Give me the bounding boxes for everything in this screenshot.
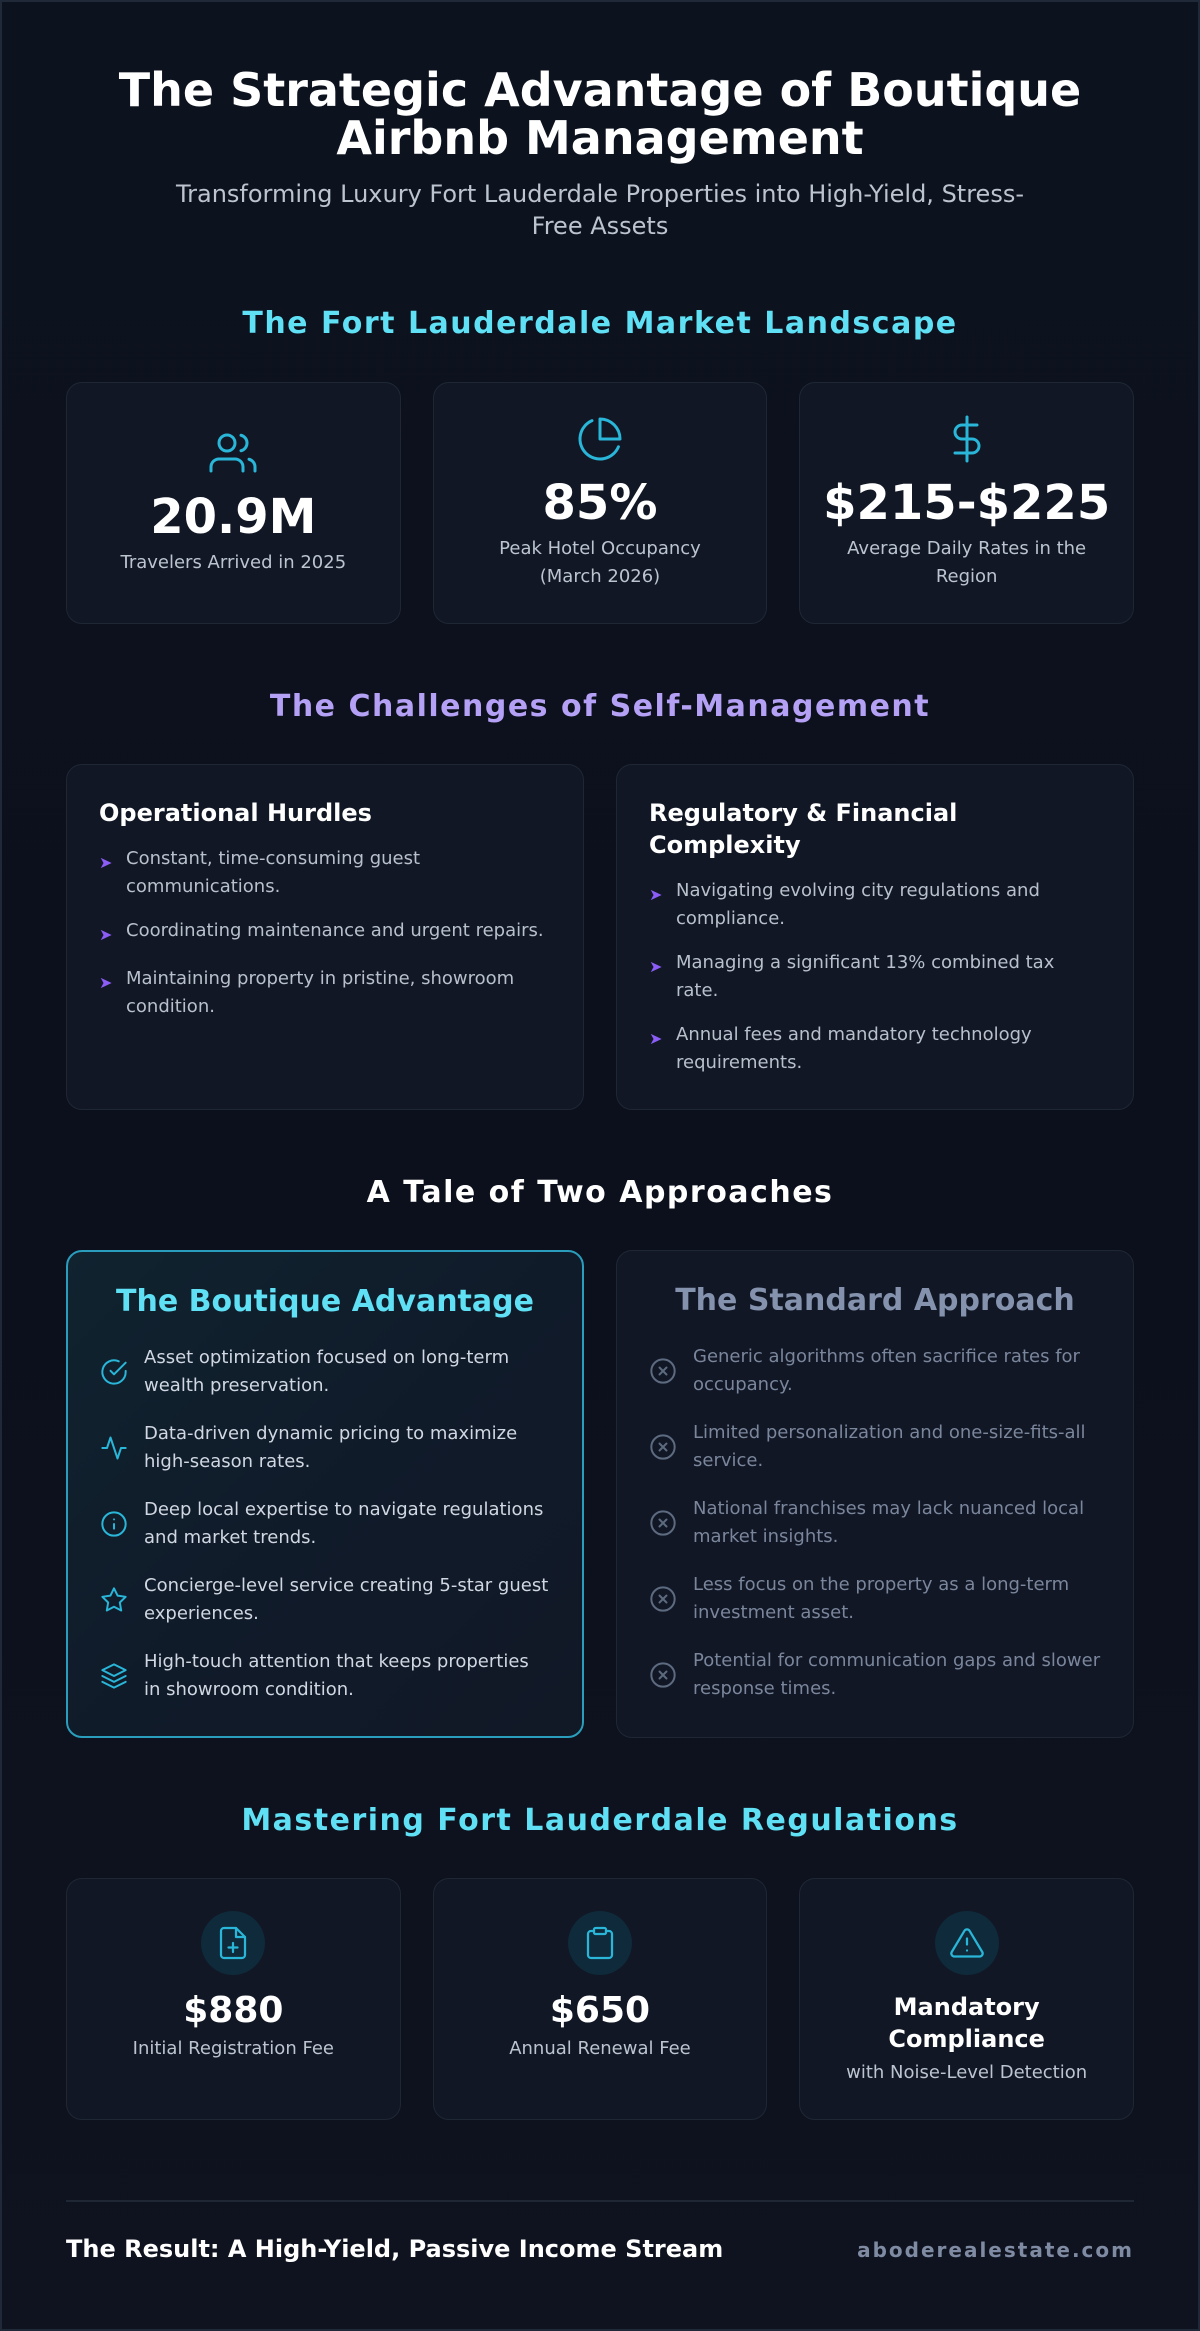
icon: activity: [101, 1436, 127, 1460]
drawback row: [650, 1422, 1086, 1471]
list item: Managing a significant 13% combined tax: [676, 952, 1054, 973]
row text: [144, 1423, 517, 1472]
panel: initial registration fee: [66, 1878, 401, 2120]
row text: Deep local expertise to navigate regulations: [144, 1499, 543, 1520]
row text: investment asset.: [693, 1602, 854, 1623]
footer divider: [66, 2200, 1134, 2202]
row text: experiences.: [144, 1603, 259, 1624]
panel: market stat travelers: [66, 382, 401, 624]
list item: condition.: [126, 996, 215, 1017]
row text: National franchises may lack nuanced local: [693, 1498, 1084, 1519]
row text: Generic algorithms often sacrifice rates for: [693, 1346, 1080, 1367]
compliance heading: [832, 1991, 1101, 2055]
row text: Potential for communication gaps and slower: [693, 1650, 1100, 1671]
feature row: [101, 1499, 543, 1548]
icon: warning triangle: [935, 1911, 999, 1975]
stat label: Travelers Arrived in 2025: [120, 552, 346, 573]
panel heading: Complexity: [649, 831, 801, 859]
heading: challenges: The Challenges of Self-Management: [270, 688, 930, 724]
icon: info: [101, 1511, 127, 1537]
row text: and market trends.: [144, 1527, 316, 1548]
icon: file plus: [201, 1911, 265, 1975]
list item: ➤: [99, 853, 112, 872]
list item: ➤: [649, 885, 662, 904]
list item: [99, 968, 514, 1017]
list item: Navigating evolving city regulations and: [676, 880, 1040, 901]
panel: annual renewal fee: [433, 1878, 767, 2120]
list item: [649, 1024, 1032, 1073]
panel: market stat occupancy: [433, 382, 767, 624]
footer: result statement: The Result: A High-Yield, Passive Income Stream: [66, 2235, 723, 2263]
list item: Maintaining property in pristine, showroom: [126, 968, 514, 989]
row text: Asset optimization focused on long-term: [144, 1347, 509, 1368]
icon: x circle: [649, 1661, 677, 1689]
icon: users: [210, 434, 256, 472]
row text: [144, 1575, 548, 1624]
stat label: Average Daily Rates in the: [847, 538, 1086, 559]
panel: market stat daily rates: [799, 382, 1134, 624]
stat value: $215-$225: [823, 475, 1110, 531]
header: title and subtitle: [118, 62, 1081, 240]
list item: Coordinating maintenance and urgent repairs.: [126, 920, 544, 941]
panel: boutique advantage: [66, 1250, 584, 1738]
title: Airbnb Management: [336, 110, 864, 164]
row text: Less focus on the property as a long-term: [693, 1574, 1069, 1595]
row text: Data-driven dynamic pricing to maximize: [144, 1423, 517, 1444]
icon: x circle: [650, 1434, 676, 1460]
list item: requirements.: [676, 1052, 802, 1073]
row text: market insights.: [693, 1526, 838, 1547]
drawback row: [650, 1346, 1080, 1395]
row text: wealth preservation.: [144, 1375, 329, 1396]
row text: [693, 1422, 1086, 1471]
row text: occupancy.: [693, 1374, 793, 1395]
icon: dollar sign: [954, 416, 980, 462]
fee value: $880: [183, 1990, 283, 2031]
panel heading: Regulatory & Financial: [649, 799, 957, 827]
row text: Limited personalization and one-size-fits-all: [693, 1422, 1086, 1443]
list item: Annual fees and mandatory technology: [676, 1024, 1032, 1045]
icon: clipboard: [568, 1911, 632, 1975]
fee value: $650: [550, 1990, 650, 2031]
feature row: [101, 1575, 548, 1624]
icon: star: [101, 1587, 127, 1612]
list item: ➤: [649, 1029, 662, 1048]
row text: [693, 1498, 1084, 1547]
row text: [693, 1647, 1100, 1703]
stat value: 20.9M: [150, 489, 316, 545]
fee label: Initial Registration Fee: [133, 2038, 334, 2059]
compliance heading: Mandatory: [894, 1993, 1040, 2021]
list item: [649, 880, 1040, 929]
list item: compliance.: [676, 908, 785, 929]
icon: pie chart: [578, 418, 622, 460]
subtitle: [176, 180, 1024, 240]
list item: rate.: [676, 980, 718, 1001]
panel: regulatory and financial complexity: [616, 764, 1134, 1110]
list item: [649, 952, 1054, 1001]
heading: market landscape: The Fort Lauderdale Market Landscape: [242, 306, 958, 340]
panel heading: The Boutique Advantage: [116, 1284, 534, 1319]
fee label: Annual Renewal Fee: [509, 2038, 691, 2059]
panel heading: [649, 799, 957, 859]
row text: [693, 1571, 1069, 1627]
panel: standard approach: [616, 1250, 1134, 1738]
stat label: [847, 538, 1086, 587]
panel heading: The Standard Approach: [675, 1283, 1075, 1318]
row text: [144, 1651, 529, 1700]
subtitle: Transforming Luxury Fort Lauderdale Properties into High-Yield, Stress-: [176, 180, 1024, 208]
row text: [693, 1346, 1080, 1395]
drawback row: [650, 1498, 1084, 1547]
panel: mandatory compliance: [799, 1878, 1134, 2120]
row text: high-season rates.: [144, 1451, 310, 1472]
stat label: Peak Hotel Occupancy: [499, 538, 701, 559]
title: The Strategic Advantage of Boutique: [119, 62, 1081, 116]
list item: ➤: [99, 925, 112, 944]
compliance heading: Compliance: [888, 2025, 1045, 2053]
drawback row: [650, 1574, 1069, 1623]
heading: regulations: Mastering Fort Lauderdale Regulations: [241, 1802, 959, 1838]
stat label: (March 2026): [540, 566, 660, 587]
list item: communications.: [126, 876, 280, 897]
list item: Constant, time-consuming guest: [126, 848, 420, 869]
stat label: Region: [936, 566, 997, 587]
feature row: [101, 1347, 509, 1396]
list item: ➤: [99, 973, 112, 992]
row text: service.: [693, 1450, 763, 1471]
panel heading: Operational Hurdles: [99, 799, 372, 827]
icon: layers: [101, 1663, 127, 1689]
list item: [99, 848, 420, 897]
row text: Concierge-level service creating 5-star guest: [144, 1575, 548, 1596]
compliance label: with Noise-Level Detection: [846, 2062, 1087, 2083]
subtitle: Free Assets: [532, 212, 668, 240]
row text: [144, 1347, 509, 1396]
row text: response times.: [693, 1678, 836, 1699]
row text: High-touch attention that keeps properties: [144, 1651, 529, 1672]
footer: website: aboderealestate.com: [857, 2238, 1134, 2262]
icon: x circle: [650, 1358, 676, 1384]
icon: x circle: [649, 1585, 677, 1613]
stat value: 85%: [543, 475, 657, 531]
panel: operational hurdles: [66, 764, 584, 1110]
row text: in showroom condition.: [144, 1679, 354, 1700]
icon: check circle: [101, 1359, 127, 1385]
stat label: [499, 538, 701, 587]
icon: x circle: [650, 1510, 676, 1536]
title: [118, 62, 1081, 164]
heading: two approaches: A Tale of Two Approaches: [367, 1174, 833, 1210]
list item: ➤: [649, 957, 662, 976]
row text: [144, 1499, 543, 1548]
feature row: [101, 1423, 517, 1472]
drawback row: [649, 1647, 1101, 1703]
feature row: [101, 1651, 529, 1700]
